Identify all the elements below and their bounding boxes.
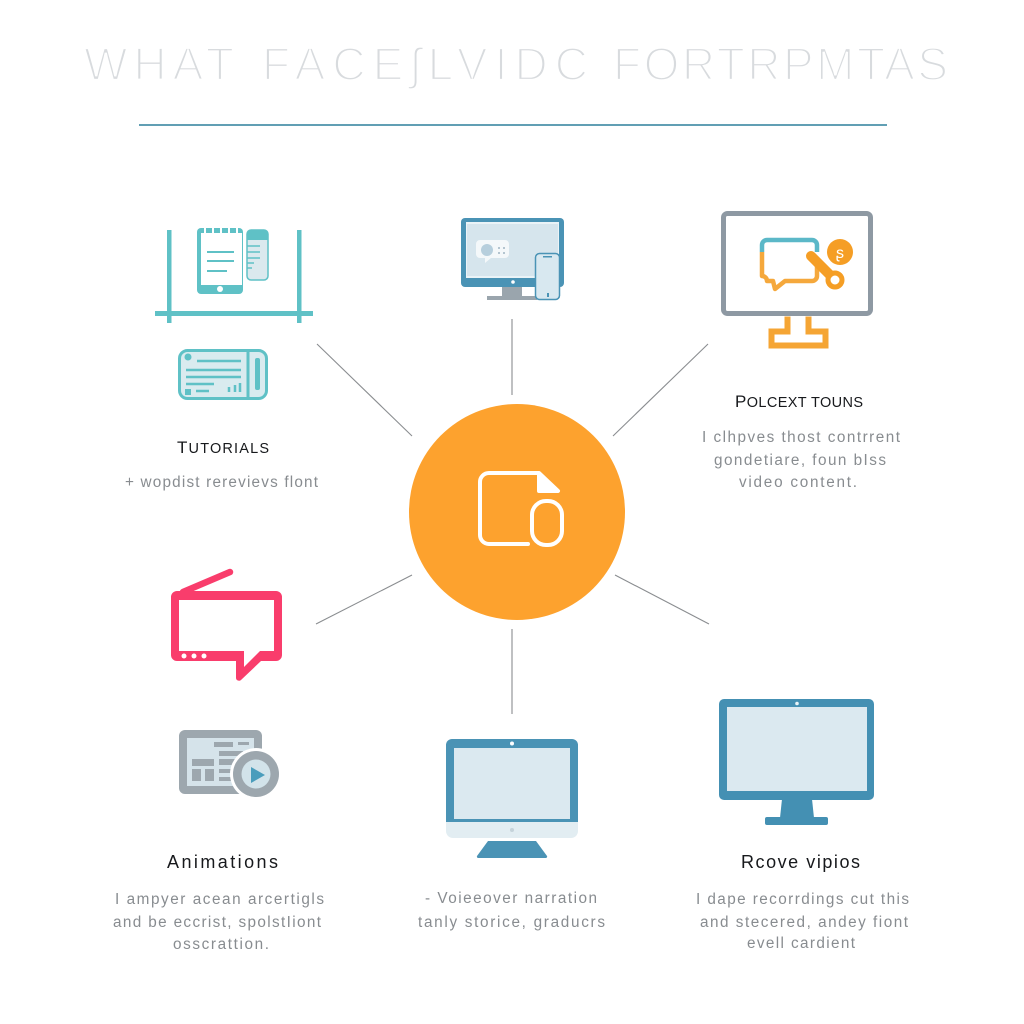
text: animations description: I ampyer acean arcertigls bbox=[115, 891, 324, 908]
text: polcext description: I clhpves thost contrrent bbox=[702, 429, 901, 446]
panel: rcove vipios bbox=[696, 699, 909, 952]
connector lines bbox=[316, 319, 709, 714]
icon: large monitor bbox=[719, 699, 874, 825]
text: voiceover description bbox=[418, 890, 605, 931]
heading: rcove vipios: Rcove vipios bbox=[741, 852, 860, 872]
text: rcove description: and stecered, andey fiont bbox=[700, 914, 909, 931]
title: WHAT bbox=[84, 38, 234, 90]
icon: document and phone bbox=[480, 473, 562, 545]
heading: animations: Animations bbox=[167, 852, 278, 872]
icon: video player bbox=[179, 730, 282, 800]
panel: top centre device bbox=[461, 218, 564, 300]
icon: pink speech bubble screen bbox=[171, 572, 282, 681]
icon: monitor and phone bbox=[461, 218, 564, 300]
panel: tutorials bbox=[125, 228, 319, 491]
text: animations description: osscrattion. bbox=[173, 936, 269, 953]
text: rcove description: evell cardient bbox=[747, 935, 856, 952]
icon: tablet on shelf bbox=[155, 228, 313, 323]
text: rcove description: I dape recorrdings cut this bbox=[696, 891, 909, 908]
text: polcext description: video content. bbox=[739, 474, 857, 491]
title rule bbox=[139, 124, 887, 126]
text: tutorials description: + wopdist rerevievs flont bbox=[125, 474, 319, 491]
text: polcext description bbox=[702, 429, 901, 491]
text: voiceover description: - Voieeover narration bbox=[425, 890, 597, 907]
icon: monitor with chat and wrench: ʂ bbox=[836, 245, 844, 262]
text: animations description: and be eccrist, spolstIiont bbox=[113, 914, 322, 931]
icon: desktop monitor with chin bbox=[446, 739, 578, 858]
panel: animations bbox=[113, 572, 324, 953]
title bbox=[84, 38, 948, 90]
heading: polcext touns: POLCEXT TOUNS bbox=[735, 392, 863, 411]
text: voiceover description: tanly storice, graducrs bbox=[418, 914, 605, 931]
icon: monitor with chat and wrench bbox=[724, 214, 870, 346]
icon: ticket card bbox=[180, 350, 266, 399]
heading: tutorials: TUTORIALS bbox=[177, 438, 269, 457]
central hub bbox=[409, 404, 625, 620]
title: FORTRPMTAS bbox=[613, 38, 948, 90]
text: animations description bbox=[113, 891, 324, 953]
panel: voiceover bbox=[418, 739, 605, 931]
title: FACEʃLVIDC bbox=[262, 38, 588, 90]
panel: polcext touns bbox=[702, 214, 901, 491]
text: rcove description bbox=[696, 891, 909, 952]
text: polcext description: gondetiare, foun bIss bbox=[714, 452, 886, 469]
